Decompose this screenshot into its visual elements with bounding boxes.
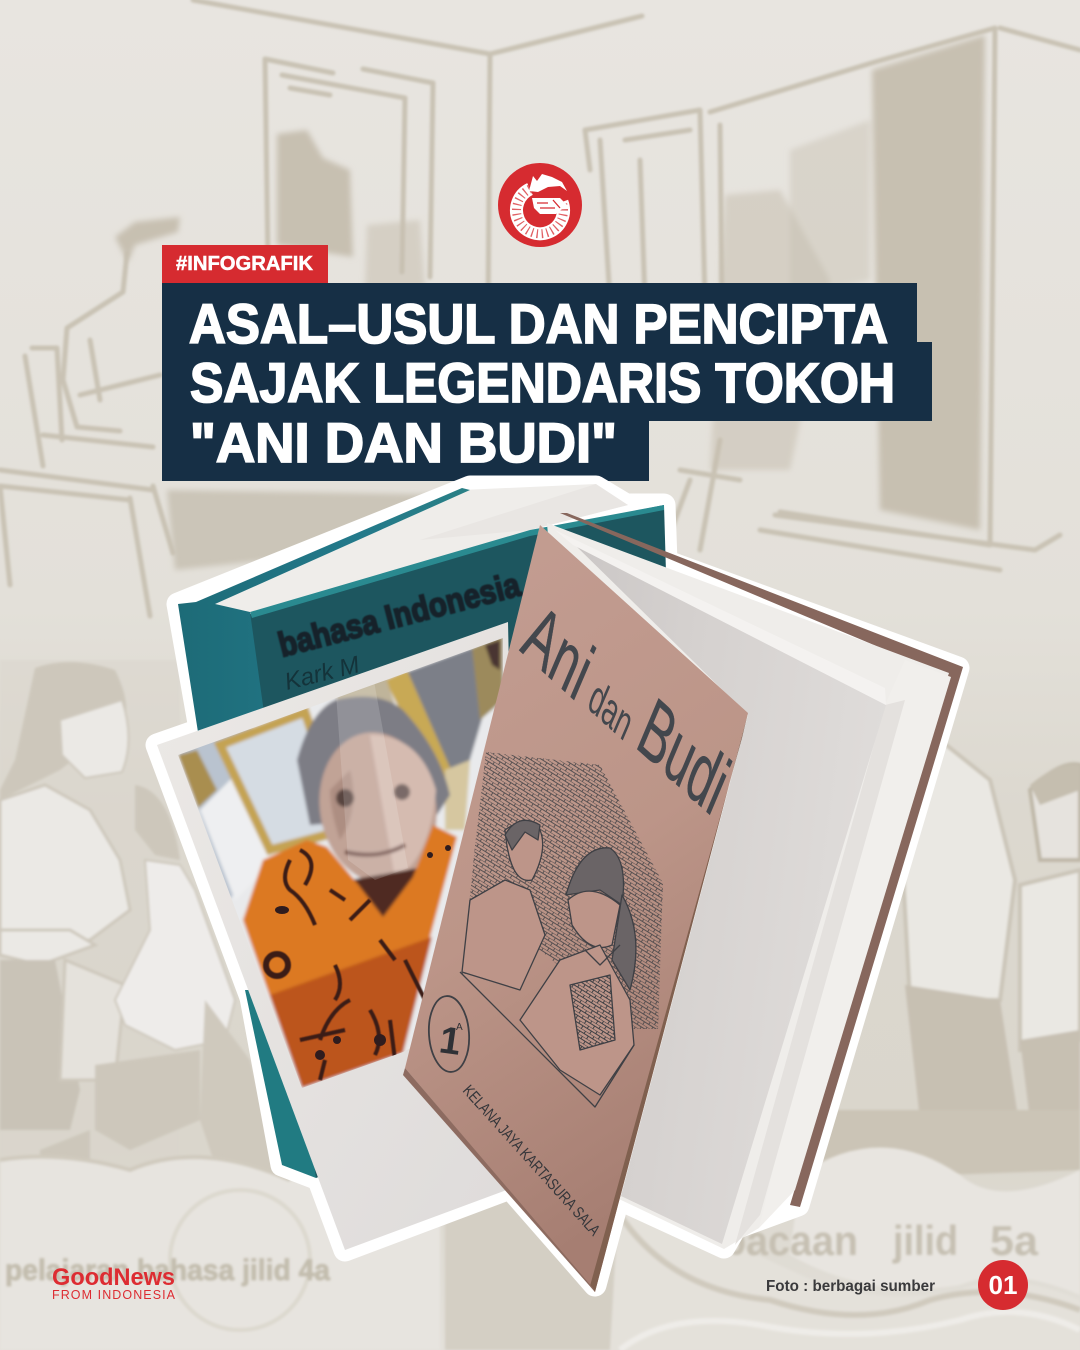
faded text: right book label: jilid [892,1217,958,1264]
cover stamp: 1A [426,995,472,1073]
faded text: left book label: pelajaran bahasa jilid 4a [5,1254,330,1287]
page number badge [978,1260,1028,1310]
teal book spine [178,488,470,745]
polaroid paper [157,622,520,1250]
polaroid photo [157,622,520,1250]
sticker: white die-cut outline behind book collage [157,487,958,1285]
ornament: lower scroll panel [0,1148,1080,1350]
footer logo subtitle: FROM INDONESIA [52,1288,176,1302]
faded text: right book label: bacaan [722,1217,858,1264]
photo credit: Foto : berbagai sumber [766,1278,935,1295]
cover title: dan: dan [584,668,637,753]
tag: #INFOGRAFIK [162,245,328,283]
book: Ani dan Budi open pages [547,513,963,1249]
teal book handwritten note: Kark M [282,651,362,696]
cover illustration: girl [460,848,636,1107]
cover stamp: 1A: A [456,1022,463,1033]
title block [162,283,932,481]
photo: gold frames [220,712,345,850]
title line 2: SAJAK LEGENDARIS TOKOH [190,351,895,414]
teal book cover [250,505,668,1178]
sketch: children right [810,740,1080,1180]
sketch: dark hatching [115,35,985,570]
footer logo: GoodNews from Indonesia: GoodNews [52,1264,175,1291]
title line 3: "ANI DAN BUDI" [190,411,617,474]
faded text: right book label: 5a [990,1217,1039,1264]
back cover [560,513,963,1207]
teal book title: bahasa Indonesia [274,566,525,665]
cover stamp: 1A: 1 [437,1019,464,1064]
page block edge [759,660,951,1228]
sketch: room lines [0,0,1080,616]
top page edge [555,530,886,705]
orange dress [243,825,457,1088]
cover illustration: brick wall [462,752,663,1029]
faded text: right book label [722,1217,1039,1264]
translucent tape fold [335,670,408,880]
title line 1: ASAL–USUL DAN PENCIPTA [189,292,888,355]
photo: left blue wall [179,728,252,898]
dress pattern [266,850,425,1080]
inner leaf [573,543,886,1244]
tag: #INFOGRAFIK: #INFOGRAFIK [176,253,314,275]
book cover: Ani dan Budi [403,525,748,1292]
emblem: patterned G ring [517,174,567,234]
page block [547,523,949,1249]
page number badge: 01 [988,1270,1018,1300]
teal book lower spine [245,990,316,1178]
book: teal Bahasa Indonesia [178,484,668,1178]
hair [297,697,450,825]
teal book pages [190,484,628,614]
photo: grey wall [406,648,484,770]
cover title: Budi: Budi [631,675,737,837]
cover title: Ani: Ani [514,580,601,723]
cover board [405,525,748,1292]
sketch: boy with satchel, left [0,660,280,1180]
portrait photo [170,630,510,1100]
face [318,730,438,881]
neck shadow [352,867,418,920]
logo: red circle with garuda emblem [498,163,582,247]
cover illustration: boy [462,820,545,990]
cover publisher line: KELANA JAYA KARTASURA SALA [459,1082,603,1240]
